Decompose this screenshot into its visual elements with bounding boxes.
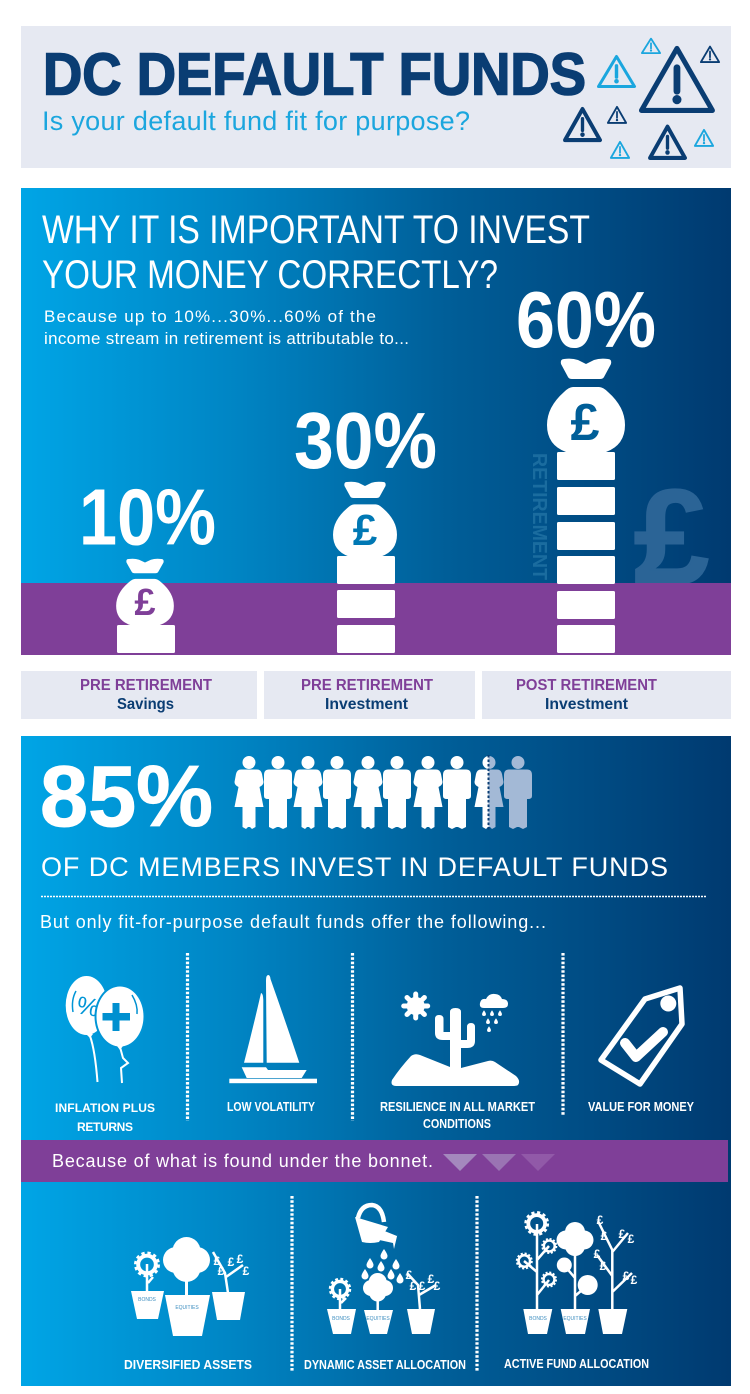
- icon: active fund allocation plants: £: [623, 1269, 630, 1283]
- column: 30%: £: [353, 506, 378, 555]
- icon: diversified assets plants: £: [214, 1254, 221, 1268]
- icon: dynamic allocation plants and watering can: £: [410, 1279, 417, 1293]
- label: active fund allocation: ACTIVE FUND ALLOCATION: [504, 1356, 649, 1371]
- label: resilience in all market conditions: RESILIENCE IN ALL MARKET: [380, 1099, 535, 1114]
- big number: 85%: [40, 749, 213, 845]
- icon: sailboat: [229, 975, 317, 1083]
- label box: post retirement investment: POST RETIREMENT: [516, 677, 657, 694]
- column: 10%: £: [134, 582, 156, 624]
- label box: pre retirement investment: PRE RETIREMENT: [301, 677, 433, 694]
- icon: active fund allocation plants: £: [600, 1259, 607, 1273]
- label: inflation plus returns: INFLATION PLUS: [55, 1101, 155, 1115]
- intro text: [44, 307, 409, 348]
- panel: header: [21, 26, 731, 168]
- label box: pre retirement savings: Savings: [117, 696, 174, 713]
- purple band: [21, 583, 731, 655]
- label: diversified assets: DIVERSIFIED ASSETS: [124, 1357, 252, 1372]
- lead-in text: But only fit-for-purpose default funds offer the following...: [40, 912, 546, 932]
- panel: 85 percent of DC members: [21, 736, 731, 1386]
- icon: dynamic allocation plants and watering can: EQUITIES: [366, 1316, 390, 1322]
- label box: pre retirement savings: [21, 671, 257, 719]
- icon: active fund allocation plants: £: [619, 1227, 626, 1241]
- icon: active fund allocation plants: £: [597, 1213, 604, 1227]
- icon: active fund allocation plants: BONDS: [529, 1316, 548, 1322]
- label: inflation plus returns: RETURNS: [77, 1120, 133, 1134]
- intro text: income stream in retirement is attributable to...: [44, 329, 409, 348]
- panel: why it is important: [21, 188, 731, 655]
- icon: diversified assets plants: BONDS: [138, 1297, 157, 1303]
- icon: active fund allocation plants: £: [594, 1247, 601, 1261]
- icon: dynamic allocation plants and watering can: £: [406, 1268, 413, 1282]
- icon: active fund allocation plants: £: [601, 1229, 608, 1243]
- sub heading: OF DC MEMBERS INVEST IN DEFAULT FUNDS: [41, 852, 668, 882]
- label box: post retirement investment: [482, 671, 731, 719]
- icon: dynamic allocation plants and watering can: £: [434, 1279, 441, 1293]
- label: inflation plus returns: [55, 1101, 155, 1134]
- icons: people row: [234, 755, 532, 830]
- heading: [42, 208, 590, 297]
- vertical label: retirement: RETIREMENT: [528, 453, 550, 580]
- intro text: Because up to 10%...30%...60% of the: [44, 307, 376, 326]
- icon: active fund allocation plants: £: [631, 1273, 638, 1287]
- label: low volatility: LOW VOLATILITY: [227, 1099, 315, 1114]
- column: 60%: 60%: [516, 275, 656, 364]
- icon: balloons: [66, 976, 146, 1083]
- column: 30%: [294, 396, 437, 653]
- banner: under the bonnet: Because of what is found under the bonnet.: [52, 1151, 433, 1171]
- icon: diversified assets plants: £: [243, 1264, 250, 1278]
- icons: warning triangles: [565, 39, 719, 158]
- icon: price tag with tick: [601, 988, 682, 1084]
- icon: desert weather: [392, 994, 519, 1086]
- title: DC DEFAULT FUNDS: [43, 42, 586, 108]
- icon: dynamic allocation plants and watering can: £: [419, 1279, 426, 1293]
- icon: diversified assets plants: £: [237, 1252, 244, 1266]
- heading: WHY IT IS IMPORTANT TO INVEST: [42, 208, 590, 252]
- label: resilience in all market conditions: [380, 1099, 535, 1131]
- icon: diversified assets plants: [131, 1237, 250, 1336]
- icon: dynamic allocation plants and watering can: [327, 1205, 441, 1334]
- icon: active fund allocation plants: [517, 1213, 638, 1334]
- column: 10%: [79, 472, 216, 653]
- icon: diversified assets plants: £: [218, 1264, 225, 1278]
- heading: YOUR MONEY CORRECTLY?: [42, 253, 498, 297]
- column: 30%: 30%: [294, 396, 437, 485]
- label: dynamic asset allocation: DYNAMIC ASSET ALLOCATION: [304, 1357, 466, 1372]
- subtitle: Is your default fund fit for purpose?: [42, 106, 470, 136]
- icon: active fund allocation plants: £: [628, 1232, 635, 1246]
- column: 10%: 10%: [79, 472, 216, 562]
- icon: active fund allocation plants: EQUITIES: [563, 1316, 587, 1322]
- label box: pre retirement investment: Investment: [325, 696, 409, 713]
- column: 60%: [516, 275, 656, 653]
- watermark pound sign: £: [634, 463, 709, 612]
- icon: diversified assets plants: £: [228, 1255, 235, 1269]
- icon: dynamic allocation plants and watering can: £: [428, 1272, 435, 1286]
- icon: diversified assets plants: EQUITIES: [175, 1305, 199, 1311]
- icon: dynamic allocation plants and watering can: BONDS: [332, 1316, 351, 1322]
- label box: pre retirement savings: PRE RETIREMENT: [80, 677, 212, 694]
- label box: post retirement investment: Investment: [545, 696, 629, 713]
- column: 60%: £: [571, 394, 600, 452]
- icon: balloons: %: [75, 991, 101, 1023]
- label: value for money: VALUE FOR MONEY: [588, 1099, 694, 1114]
- label: resilience in all market conditions: CONDITIONS: [423, 1116, 491, 1131]
- banner: under the bonnet: [21, 1140, 728, 1182]
- label box: pre retirement investment: [264, 671, 475, 719]
